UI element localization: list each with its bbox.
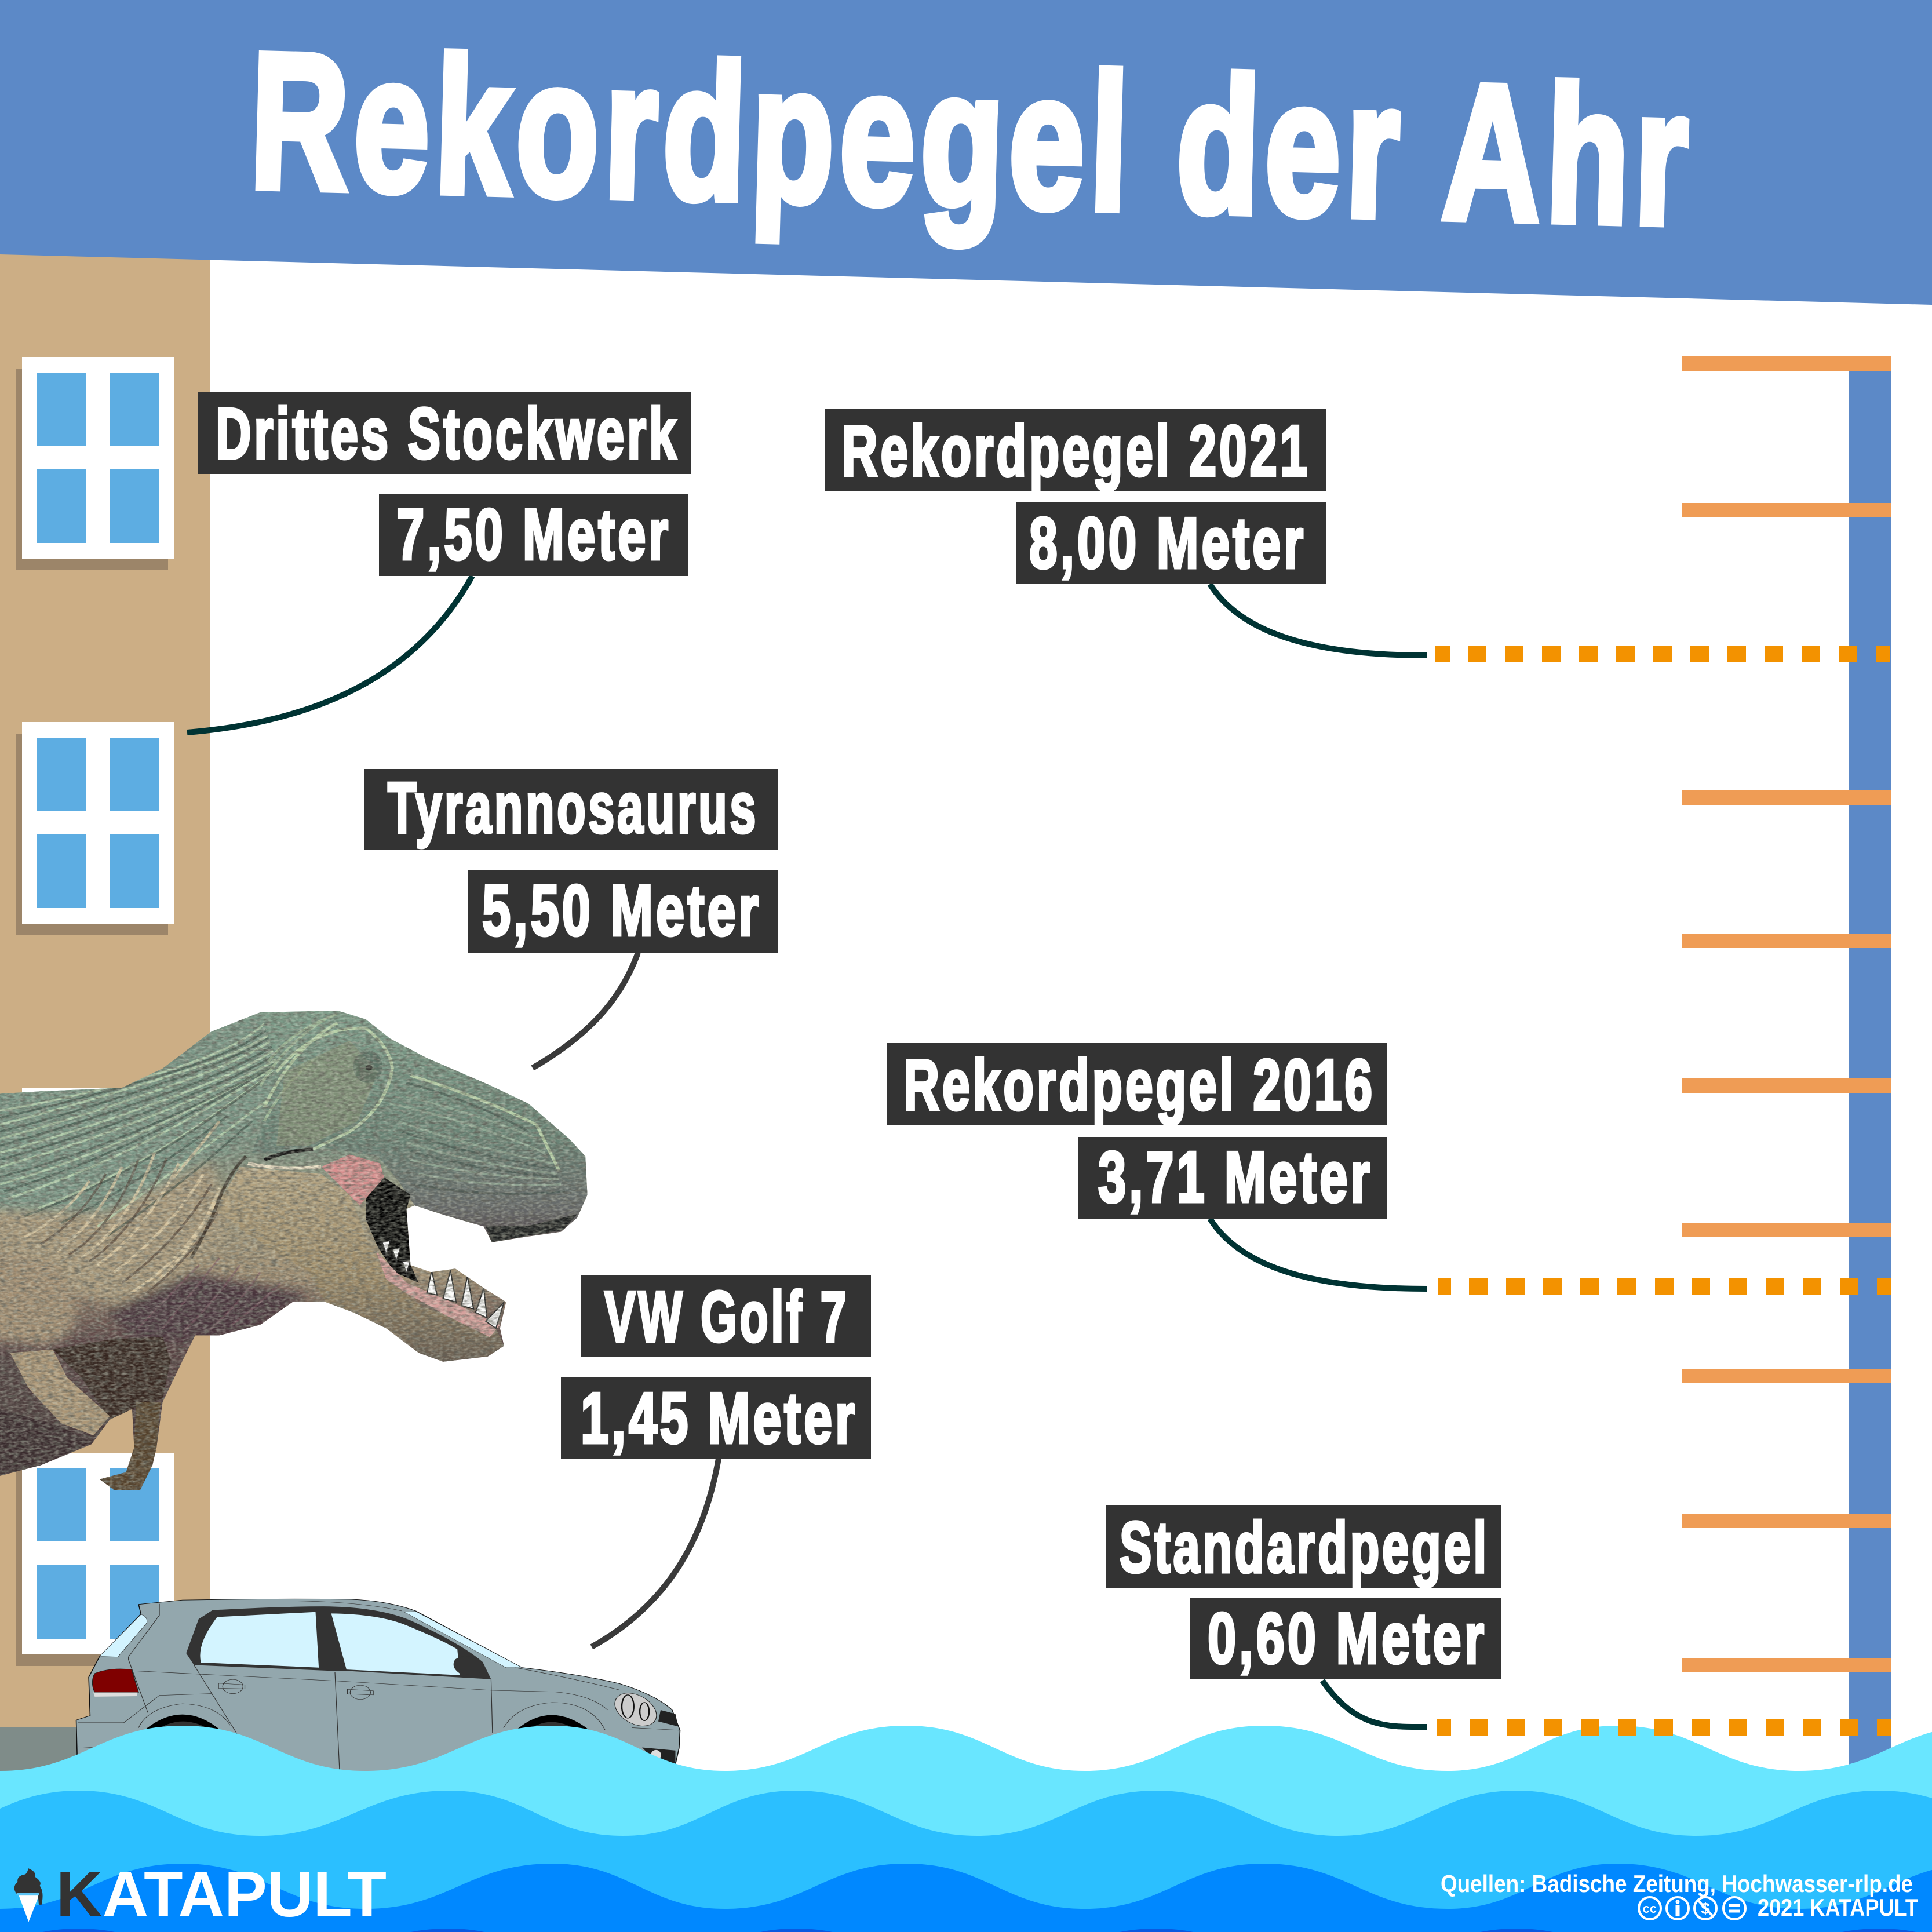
label: 3,71 Meter: 3,71 Meter: [1098, 1138, 1373, 1217]
car body lines and handles: [78, 1601, 680, 1771]
wordmark: KATAPULT: [56, 1859, 387, 1930]
t-rex eye socket: [353, 1051, 382, 1083]
dotted line: Rekordpegel 2016: [1438, 1278, 1891, 1295]
t-rex brow and eye ridge: [264, 1023, 559, 1171]
t-rex teeth: [382, 1241, 504, 1328]
t-rex cheek and lower jaw: [216, 1167, 504, 1362]
label: VW Golf 7: VW Golf 7: [604, 1277, 849, 1357]
label: 8,00 Meter: 8,00 Meter: [1029, 504, 1306, 584]
car headlamp: [607, 1690, 665, 1729]
t-rex upper head: [252, 1011, 588, 1242]
t-rex base colour: [0, 1005, 602, 1497]
t-rex soft colour patches: [0, 1005, 309, 1483]
building facade: [0, 249, 210, 1785]
leader line: VW Golf 7: [592, 1459, 719, 1647]
title banner: [0, 0, 1932, 305]
t-rex snout texture: [390, 1096, 561, 1185]
icon: creative commons badges: [1639, 1897, 1745, 1919]
t-rex snout dark marks: [402, 1082, 565, 1194]
leader line: Drittes Stockwerk: [187, 576, 472, 732]
label: 3,71 Meter: [1078, 1137, 1387, 1219]
t-rex lip line: [264, 1149, 313, 1160]
label: 7,50 Meter: 7,50 Meter: [396, 495, 671, 575]
copyright: [1639, 1894, 1918, 1921]
car windshield: [404, 1612, 522, 1668]
label: 0,60 Meter: 0,60 Meter: [1208, 1599, 1487, 1679]
label: 7,50 Meter: [379, 494, 688, 576]
water: layer 4: [0, 1929, 1932, 1932]
t-rex claw: [100, 1402, 161, 1490]
dotted line: Standardpegel: [1437, 1719, 1891, 1736]
t-rex neck dark stripes: [0, 1029, 276, 1238]
label: Drittes Stockwerk: [198, 392, 691, 474]
t-rex belly shade: [0, 1409, 92, 1476]
car grille and fog lamp: [642, 1710, 678, 1767]
t-rex upper teeth shadow: [486, 1214, 577, 1242]
label: VW Golf 7: [581, 1275, 871, 1357]
t-rex illustration: [0, 1005, 602, 1497]
label: 5,50 Meter: 5,50 Meter: [482, 871, 761, 951]
gauge pole: [1849, 364, 1891, 1813]
label: Rekordpegel 2016: Rekordpegel 2016: [903, 1045, 1375, 1125]
car front side glass: [331, 1613, 460, 1675]
water: layer 1: [0, 1726, 1932, 1932]
window: ground floor: [16, 1453, 174, 1666]
leader line: Rekordpegel 2021: [1210, 584, 1427, 655]
label: Standardpegel: [1106, 1505, 1501, 1588]
car wheel arches: [138, 1715, 598, 1738]
t-rex mottled dark skin texture: [0, 1005, 602, 1497]
t-rex head mottling: [276, 1040, 378, 1146]
label: 1,45 Meter: 1,45 Meter: [581, 1379, 858, 1459]
t-rex neck brown streaks: [41, 1158, 217, 1293]
car window frame: [186, 1606, 491, 1679]
leader line: Standardpegel: [1322, 1681, 1427, 1727]
label: Rekordpegel 2016: [887, 1043, 1387, 1125]
window: third floor: [16, 357, 174, 570]
t-rex pale neck streaks: [24, 1121, 220, 1293]
car rear side glass: [200, 1612, 319, 1668]
copyright: cc: [1643, 1901, 1657, 1916]
label: Drittes Stockwerk: Drittes Stockwerk: [216, 394, 679, 474]
t-rex chest shadow: [53, 1337, 171, 1420]
window: second floor: [16, 722, 174, 935]
label: Tyrannosaurus: Tyrannosaurus: [388, 768, 759, 848]
t-rex mottled light skin texture: [0, 1005, 602, 1497]
icon: ice cream cone: [14, 1868, 43, 1922]
t-rex cheek fold: [191, 1156, 246, 1258]
dotted line: Rekordpegel 2021: [1435, 646, 1890, 662]
label: Standardpegel: Standardpegel: [1120, 1508, 1489, 1588]
car rear window: [99, 1614, 147, 1657]
car tail lamp: [92, 1669, 138, 1697]
car body: [76, 1599, 680, 1773]
window: first floor: [16, 1088, 174, 1301]
t-rex mouth cavity: [366, 1178, 419, 1282]
water: layer 2: [0, 1791, 1932, 1932]
t-rex throat wrinkles: [138, 1258, 280, 1332]
water: layer 3: [0, 1864, 1932, 1932]
t-rex brow stripes behind eye: [260, 1014, 337, 1121]
car: VW Golf 7: [76, 1599, 680, 1773]
leader line: Tyrannosaurus: [533, 953, 638, 1068]
car mirror: [454, 1656, 480, 1675]
t-rex lower jaw inner flesh: [376, 1251, 500, 1337]
label: Rekordpegel 2021: Rekordpegel 2021: [842, 411, 1310, 491]
logo: Katapult: [14, 1859, 387, 1930]
t-rex palate: [321, 1154, 384, 1205]
label: Rekordpegel 2021: [825, 409, 1326, 491]
label: 1,45 Meter: [561, 1377, 871, 1459]
t-rex neck pale green stripes: [0, 1023, 276, 1227]
label: Tyrannosaurus: [364, 768, 778, 850]
t-rex arm: [10, 1350, 110, 1435]
copyright: $: [1701, 1900, 1710, 1918]
leader line: Rekordpegel 2016: [1210, 1219, 1427, 1289]
gauge tick marks: [1682, 356, 1891, 1672]
